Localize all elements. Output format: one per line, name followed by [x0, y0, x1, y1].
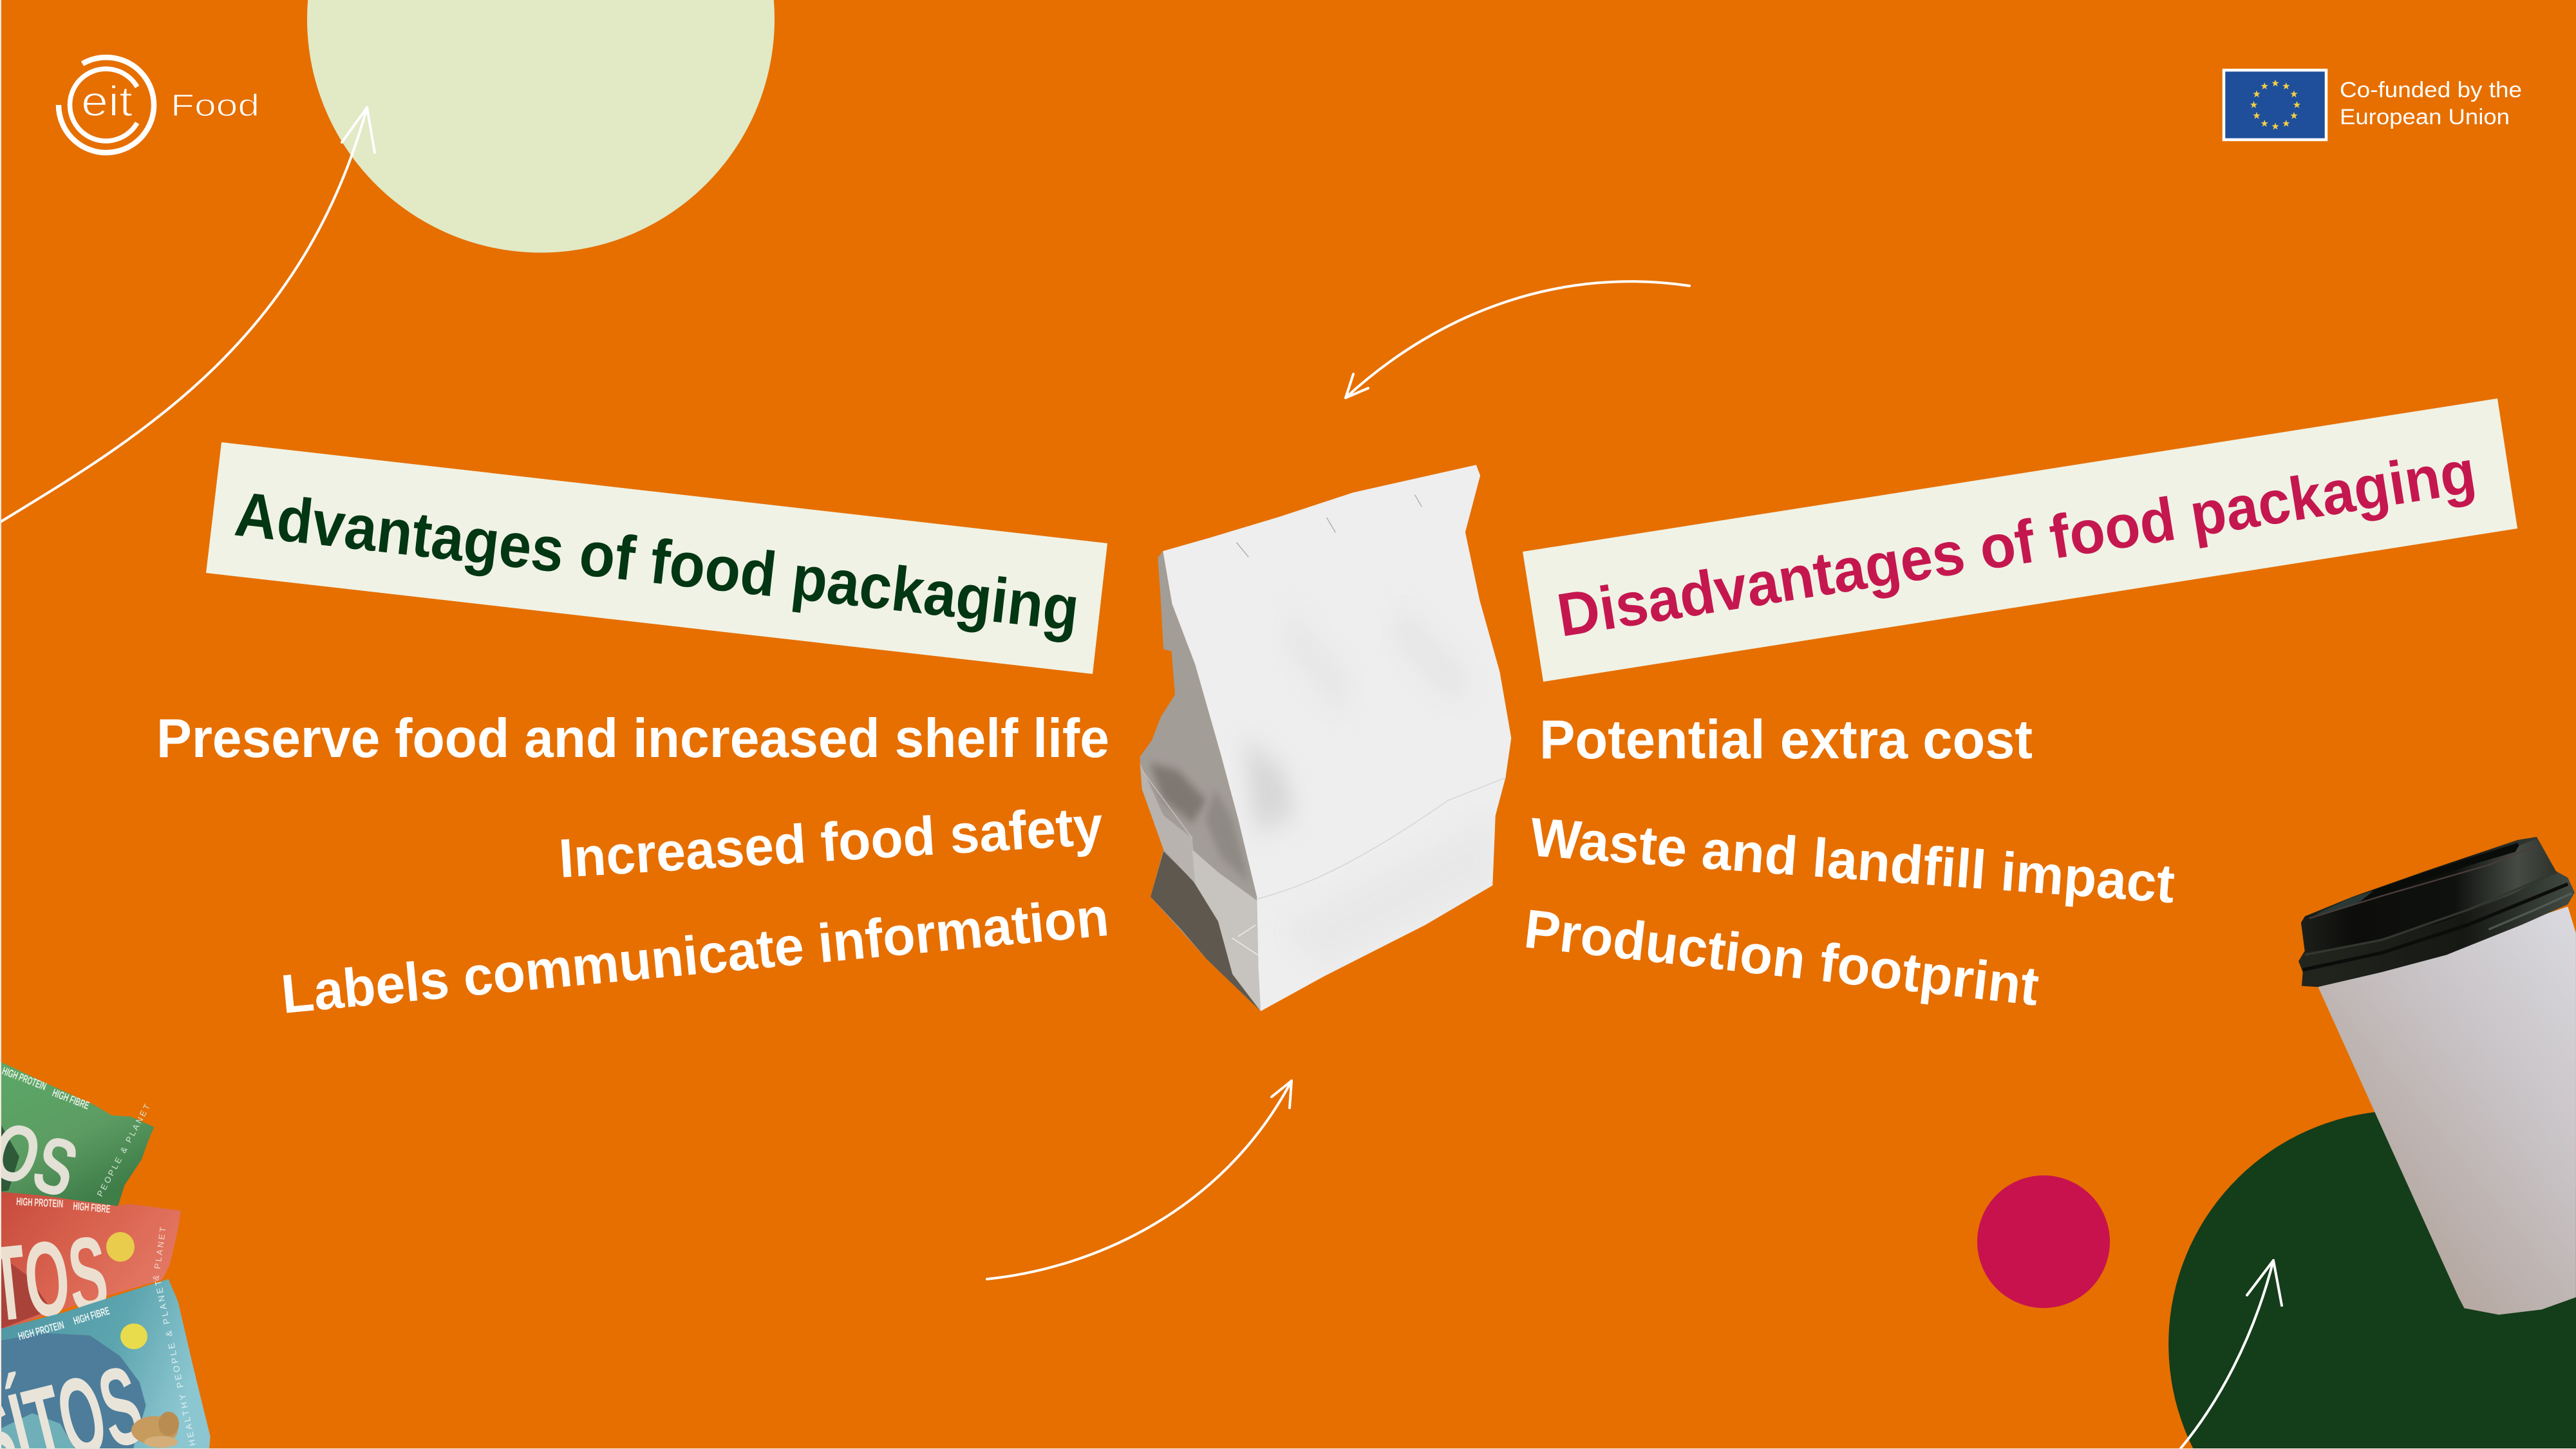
logo: EIT Food	[59, 57, 259, 153]
disadvantage 1: Potential extra cost	[1539, 709, 2033, 771]
logo rings	[59, 57, 154, 153]
coffee cup photo	[2299, 837, 2576, 1314]
EU text: Co-funded by the	[2340, 78, 2522, 102]
disadvantage 2: Waste and landfill impact	[1528, 807, 2177, 915]
heading: advantages: Advantages of food packaging	[232, 478, 1083, 644]
red bag: & PLANET	[151, 1224, 168, 1281]
teal bag: HEALTHY PEOPLE & PLANET	[153, 1277, 198, 1446]
heading: disadvantages: Disadvantages of food packaging	[1553, 437, 2481, 650]
bag left gusset	[1140, 551, 1263, 1011]
bag fold lines and staples	[1142, 495, 1505, 955]
advantages list	[156, 708, 1111, 1025]
cup body	[2318, 907, 2576, 1314]
green bag	[0, 1061, 154, 1215]
snack bags photo	[0, 1061, 211, 1449]
EU text	[2340, 78, 2522, 129]
green bag: PEOPLE & PLANET	[95, 1101, 153, 1198]
teal bag	[0, 1277, 211, 1449]
paper bag photo	[1140, 465, 1511, 1011]
panel: advantages heading	[206, 442, 1107, 674]
disadvantages list	[1521, 709, 2177, 1018]
disadvantage 3: Production footprint	[1521, 898, 2042, 1018]
logo wordmark eit: eit	[81, 77, 133, 125]
arrow: top toward bag	[1346, 281, 1689, 398]
dark green circle	[2168, 1110, 2576, 1449]
logo wordmark Food: Food	[171, 89, 259, 123]
cup lid	[2299, 837, 2575, 987]
EU flag	[2224, 70, 2326, 140]
advantage 3: Labels communicate information	[279, 886, 1111, 1025]
red bag: HIGH PROTEIN	[16, 1195, 64, 1210]
arrow: bottom toward bag	[987, 1081, 1292, 1279]
teal bag: HIGH PROTEIN	[17, 1319, 66, 1343]
advantage 1: Preserve food and increased shelf life	[156, 708, 1109, 769]
green bag: HIGH PROTEIN	[1, 1065, 48, 1093]
bag front face	[1163, 465, 1511, 1011]
arrow: over dark circle	[2181, 1260, 2282, 1448]
green bag: HIGH FIBRE	[51, 1087, 91, 1112]
crimson circle	[1977, 1175, 2110, 1308]
teal bag: HIGH FIBRE	[72, 1305, 111, 1327]
panel: disadvantages heading	[1523, 398, 2517, 682]
arrow: rising to pale circle	[1, 108, 375, 521]
pale green circle	[307, 0, 775, 252]
EU co-funding block	[2224, 70, 2522, 140]
bag front shading	[1244, 747, 1495, 913]
EU text: European Union	[2340, 105, 2510, 129]
advantage 2: Increased food safety	[557, 795, 1105, 890]
peanuts on teal bag	[131, 1412, 179, 1448]
red bag: HIGH FIBRE	[73, 1200, 111, 1215]
